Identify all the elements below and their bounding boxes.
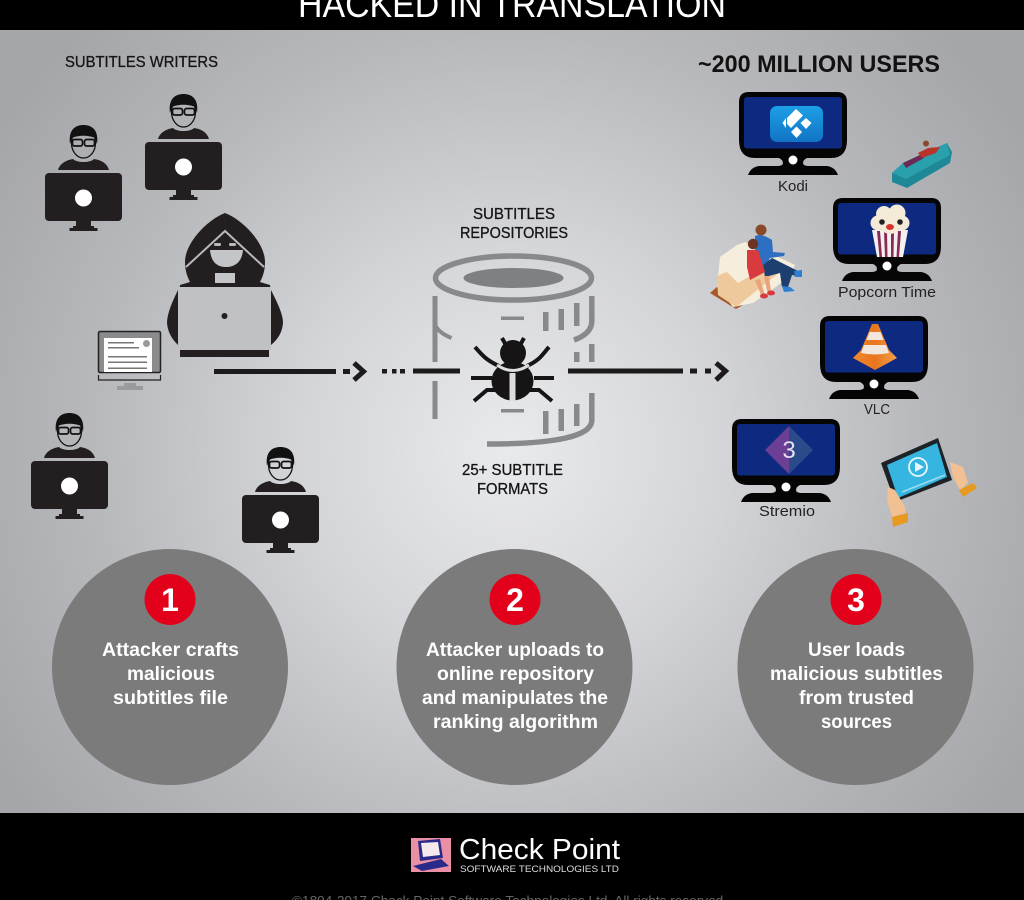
- text: step 3 description: sources: [821, 712, 892, 733]
- badge: number 3: 3: [847, 582, 865, 618]
- icon: hooded hacker with laptop: [167, 213, 283, 357]
- logo: Check Point: [411, 834, 620, 875]
- arrow: attacker to repository: [214, 363, 460, 380]
- heading: subtitles writers: SUBTITLES WRITERS: [65, 54, 218, 71]
- text: step 1 description: Attacker crafts: [102, 640, 239, 661]
- label: 25+ subtitle formats: FORMATS: [477, 481, 548, 498]
- title bar: [0, 0, 1024, 30]
- tv: Stremio: [732, 419, 840, 520]
- icon: writer at monitor 3: [31, 413, 108, 519]
- panel: step 2: [396, 549, 632, 785]
- panel: step 1: [52, 549, 288, 785]
- logo: Check Point: SOFTWARE TECHNOLOGIES LTD: [460, 864, 619, 875]
- heading: subtitles repositories: [460, 206, 568, 242]
- heading: subtitles repositories: SUBTITLES: [473, 206, 555, 223]
- text: step 2 description: online repository: [437, 664, 594, 685]
- text: step 3 description: [770, 640, 943, 733]
- icon: hands holding tablet: [881, 438, 977, 527]
- text: step 2 description: ranking algorithm: [433, 712, 598, 733]
- panel: step 3: [738, 549, 974, 785]
- icon: repository cylinder: [432, 256, 594, 444]
- heading: subtitles repositories: REPOSITORIES: [460, 225, 568, 242]
- label: 25+ subtitle formats: 25+ SUBTITLE: [462, 462, 563, 479]
- icon: subtitle document monitor: [98, 332, 160, 390]
- tv: Popcorn Time: Popcorn Time: [838, 285, 936, 301]
- text: step 3 description: User loads: [808, 640, 905, 661]
- text: step 2 description: [422, 640, 608, 733]
- heading: 200 million users: ~200 MILLION USERS: [698, 51, 940, 78]
- text: step 1 description: [102, 640, 239, 709]
- tv: VLC: [820, 316, 928, 418]
- footer bar: [0, 813, 1024, 900]
- tv: Popcorn Time: [833, 198, 941, 301]
- icon: bug: [471, 338, 554, 401]
- arrow: repository to users: [568, 363, 726, 380]
- icon: person on teal couch: [892, 140, 952, 188]
- label: 25+ subtitle formats: [462, 462, 563, 498]
- tv: Stremio: 3: [782, 437, 796, 464]
- tv: VLC: VLC: [864, 402, 890, 418]
- text: step 2 description: and manipulates the: [422, 688, 608, 709]
- text: step 1 description: malicious: [127, 664, 215, 685]
- tv: Stremio: Stremio: [759, 504, 815, 520]
- text: step 2 description: Attacker uploads to: [426, 640, 604, 661]
- icon: writer at monitor 1: [45, 125, 122, 231]
- logo: Check Point: Check Point: [459, 834, 620, 866]
- text: step 3 description: malicious subtitles: [770, 664, 943, 685]
- badge: number 1: 1: [161, 582, 179, 618]
- icon: writer at monitor 2: [145, 94, 222, 200]
- badge: number 3: [830, 574, 882, 625]
- tv: Kodi: [739, 92, 847, 195]
- tv: Kodi: Kodi: [778, 179, 808, 195]
- text: step 1 description: subtitles file: [113, 688, 228, 709]
- badge: number 1: [144, 574, 196, 625]
- text: step 3 description: from trusted: [799, 688, 914, 709]
- icon: couple on cream sofa: [710, 224, 802, 309]
- badge: number 2: [490, 574, 540, 625]
- icon: writer at monitor 4: [242, 447, 319, 553]
- badge: number 2: 2: [506, 582, 524, 618]
